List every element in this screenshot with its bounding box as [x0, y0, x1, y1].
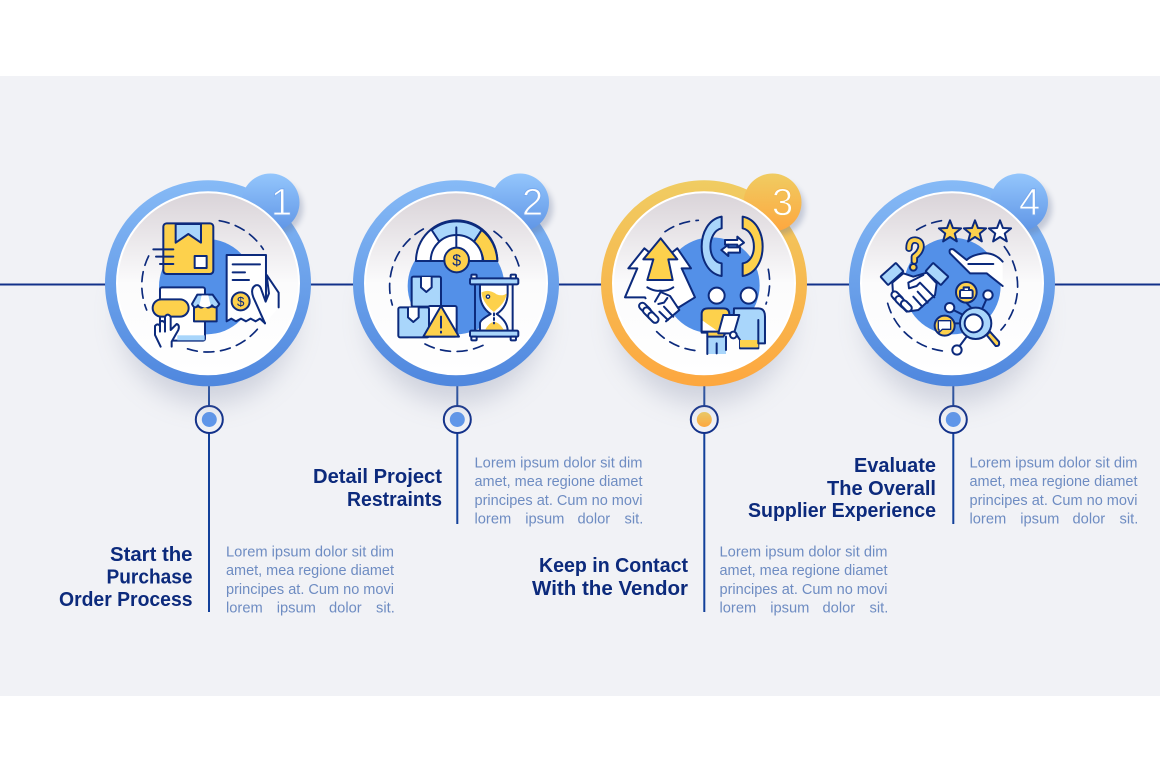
- step 3: [532, 174, 888, 616]
- step 1 body text: [226, 544, 395, 616]
- step 2 number badge: 2: [522, 182, 543, 224]
- step 4 connector and node: [940, 380, 967, 524]
- icon: vendor contact: [625, 217, 770, 354]
- step 3 body text: [720, 544, 888, 616]
- step 1 heading: [59, 543, 192, 611]
- step 1 number badge: 1: [271, 182, 292, 224]
- step 3 body text: dolor: [822, 600, 855, 616]
- step 4 body text: amet, mea regione diamet: [970, 474, 1138, 490]
- icon: purchase order: [142, 221, 279, 352]
- step 3 body text: lorem: [720, 600, 756, 616]
- step 2 heading: Detail Project: [313, 465, 442, 488]
- step 4 heading: Evaluate: [854, 454, 936, 477]
- step 1 connector and node: [196, 380, 223, 612]
- step 2 body text: amet, mea regione diamet: [474, 474, 642, 490]
- step 2 body text: dolor: [578, 512, 610, 528]
- step 4: [748, 174, 1138, 528]
- step 3 body text: sit.: [870, 600, 888, 616]
- step 4 body text: Lorem ipsum dolor sit dim: [970, 456, 1138, 472]
- step 3 connector and node: [691, 380, 718, 612]
- step 3 number badge: 3: [772, 182, 793, 224]
- step 3 heading: Keep in Contact: [539, 554, 688, 577]
- step 1 body text: principes at. Cum no movi: [226, 582, 394, 598]
- step 1 circle frame: [105, 174, 311, 404]
- step 1 heading: Order Process: [59, 588, 192, 611]
- icon: purchase order: $: [237, 294, 245, 309]
- step 2 heading: Restraints: [347, 488, 442, 511]
- step 4 body text: lorem: [970, 512, 1006, 528]
- step 1 heading: Purchase: [106, 566, 192, 588]
- step 2 body text: lorem: [474, 512, 511, 528]
- timeline horizontal line: [0, 284, 1160, 286]
- step 3 heading: [532, 554, 688, 600]
- step 2 body text: [474, 456, 643, 528]
- step 4 heading: The Overall: [827, 477, 936, 500]
- step 3 body text: principes at. Cum no movi: [720, 582, 888, 598]
- step 1 body text: sit.: [376, 600, 395, 616]
- step 1 body text: Lorem ipsum dolor sit dim: [226, 544, 394, 560]
- step 1 heading: Start the: [110, 543, 192, 566]
- step 4 number badge: 4: [1019, 182, 1040, 224]
- step 1 body text: ipsum: [277, 600, 316, 616]
- step 4 heading: [748, 454, 936, 522]
- step 2 body text: principes at. Cum no movi: [474, 493, 642, 509]
- step 3 body text: ipsum: [770, 600, 809, 616]
- step 3 body text: amet, mea regione diamet: [720, 563, 888, 579]
- step 3 body text: Lorem ipsum dolor sit dim: [720, 544, 888, 560]
- step 1 body text: lorem: [226, 600, 263, 616]
- step 4 body text: ipsum: [1020, 512, 1059, 528]
- icon: budget gauge and restraints: $: [452, 253, 461, 270]
- step 2 circle frame: [353, 174, 559, 404]
- step 2 body text: Lorem ipsum dolor sit dim: [474, 456, 642, 472]
- step 4 circle frame: [849, 174, 1055, 404]
- step 2 body text: ipsum: [525, 512, 564, 528]
- step 1 body text: amet, mea regione diamet: [226, 563, 394, 579]
- step 4 body text: [970, 456, 1138, 528]
- step 2 connector and node: [444, 380, 471, 524]
- step 2 body text: sit.: [624, 512, 643, 528]
- step 2: [313, 174, 643, 528]
- step 4 body text: dolor: [1072, 512, 1105, 528]
- icon: budget gauge and restraints: [390, 220, 520, 351]
- step 3 circle frame: [601, 174, 807, 404]
- step 2 heading: [313, 465, 442, 511]
- icon: supplier evaluation: [881, 220, 1018, 355]
- step 3 heading: With the Vendor: [532, 577, 688, 600]
- step 4 body text: principes at. Cum no movi: [970, 493, 1138, 509]
- step 1 body text: dolor: [329, 600, 362, 616]
- step 1: [59, 174, 395, 616]
- step 4 heading: Supplier Experience: [748, 499, 936, 522]
- step 4 body text: sit.: [1120, 512, 1138, 528]
